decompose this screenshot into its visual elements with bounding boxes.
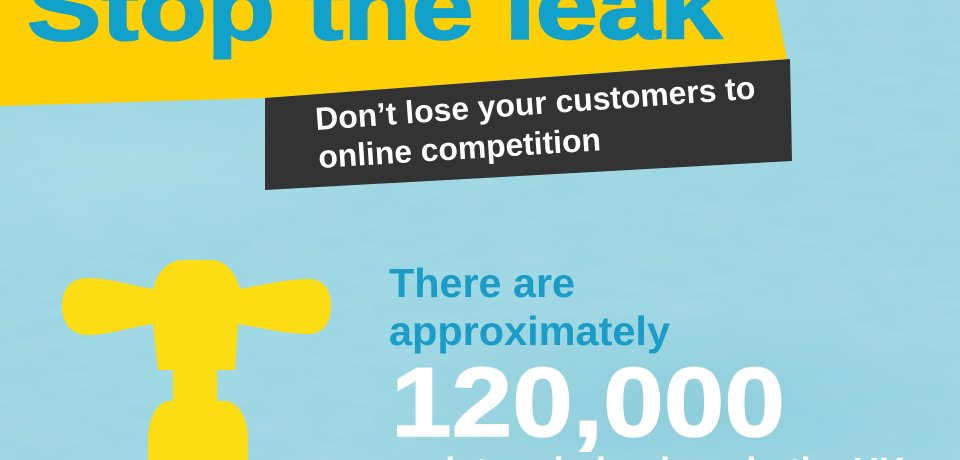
intro text: approximately [389, 308, 670, 354]
yellow title banner [0, 0, 787, 106]
subtitle text: Don’t lose your customers to [314, 70, 756, 137]
intro text [389, 260, 670, 354]
statistic text block [389, 260, 906, 460]
subtitle text [314, 70, 756, 175]
intro text: There are [389, 260, 575, 306]
icon: yellow tap [62, 260, 331, 460]
big number: 120,000 [391, 347, 785, 457]
subtitle text: online competition [317, 121, 602, 175]
subtitle panel [265, 59, 792, 190]
